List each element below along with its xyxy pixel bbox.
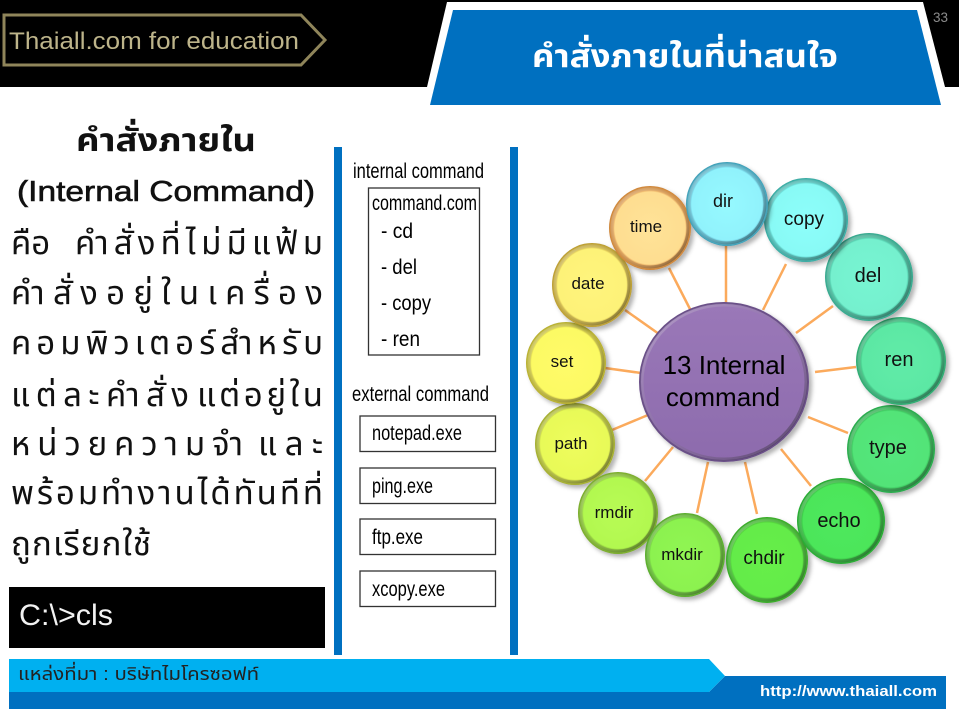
node: dir: dir	[713, 191, 733, 211]
node: echo	[797, 478, 885, 564]
node: mkdir: mkdir	[661, 545, 703, 564]
node: path: path	[554, 434, 588, 453]
ping.exe box: ping.exe	[372, 475, 433, 498]
body text: แต่อยู่ใน	[197, 376, 323, 415]
ftp.exe box	[360, 519, 496, 554]
xcopy.exe box	[360, 571, 496, 606]
node: dir	[686, 162, 768, 246]
left text panel	[11, 118, 323, 564]
command.com box: - copy	[381, 292, 431, 315]
body text: ถูกเรียกใช้	[11, 525, 151, 564]
node: set: set	[551, 352, 574, 371]
ping.exe box	[360, 468, 496, 504]
command.com box: - ren	[381, 328, 420, 351]
node: del	[825, 233, 913, 321]
node: time: time	[630, 217, 662, 236]
blue dividers	[334, 147, 518, 655]
notepad.exe box: notepad.exe	[372, 422, 462, 445]
node: path	[535, 403, 615, 485]
node: set	[526, 322, 606, 404]
body text: คือ	[11, 224, 50, 261]
heading: Thai: คำสั่งภายใน	[76, 118, 256, 158]
body text: หน่วยความจำ	[11, 425, 243, 462]
command prompt box	[9, 587, 325, 648]
body text: คำสั่งอยู่ในเครื่อง	[11, 270, 323, 313]
url: http://www.thaiall.com	[760, 683, 937, 700]
node: chdir: chdir	[743, 548, 785, 569]
node: date	[552, 243, 632, 327]
node: copy: copy	[784, 209, 825, 230]
radial diagram	[526, 162, 946, 603]
node: time	[609, 186, 691, 270]
center node: 13 Internal	[663, 350, 785, 380]
title banner: คำสั่งภายในที่น่าสนใจ	[532, 33, 838, 74]
logo arrow label: Thaiall.com for education	[9, 28, 299, 55]
connectors	[605, 245, 856, 514]
node: ren	[856, 317, 946, 405]
external command list	[352, 383, 496, 606]
command.com box	[368, 188, 480, 355]
body text: และ	[258, 425, 323, 462]
center node	[640, 303, 808, 461]
node: ren: ren	[885, 349, 913, 371]
node: copy	[764, 178, 848, 262]
command.com box: - cd	[381, 220, 413, 243]
node: type	[847, 405, 935, 493]
node: chdir	[726, 517, 808, 603]
node: rmdir: rmdir	[595, 503, 634, 522]
node: del: del	[855, 265, 881, 287]
page number: 33	[933, 10, 948, 25]
command.com box: command.com	[372, 192, 477, 215]
title banner	[427, 2, 945, 105]
internal command list	[353, 160, 484, 355]
header band	[0, 0, 959, 87]
body text: พร้อมทำงานได้ทันทีที่	[11, 470, 323, 511]
body text: คอมพิวเตอร์สำหรับ	[11, 324, 323, 361]
body text: คำสั่งที่ไม่มีแฟ้ม	[75, 220, 323, 261]
heading: English: (Internal Command)	[17, 176, 315, 208]
node: date: date	[571, 274, 605, 293]
node: rmdir	[578, 472, 658, 554]
logo arrow label	[4, 15, 325, 65]
command.com box: - del	[381, 256, 417, 279]
internal command list: internal command	[353, 160, 484, 183]
node: type: type	[869, 437, 907, 459]
center node: command	[666, 382, 780, 412]
node: mkdir	[645, 513, 725, 597]
xcopy.exe box: xcopy.exe	[372, 578, 445, 601]
body text	[11, 220, 323, 564]
footer bar	[9, 659, 946, 709]
ftp.exe box: ftp.exe	[372, 526, 423, 549]
command prompt box: C:\>cls	[19, 599, 113, 632]
external command list: external command	[352, 383, 489, 406]
node: echo: echo	[817, 510, 861, 532]
notepad.exe box	[360, 416, 496, 452]
source text: แหล่งที่มา : บริษัทไมโครซอฟท์	[18, 661, 259, 684]
body text: แต่ละคำสั่ง	[11, 374, 189, 413]
